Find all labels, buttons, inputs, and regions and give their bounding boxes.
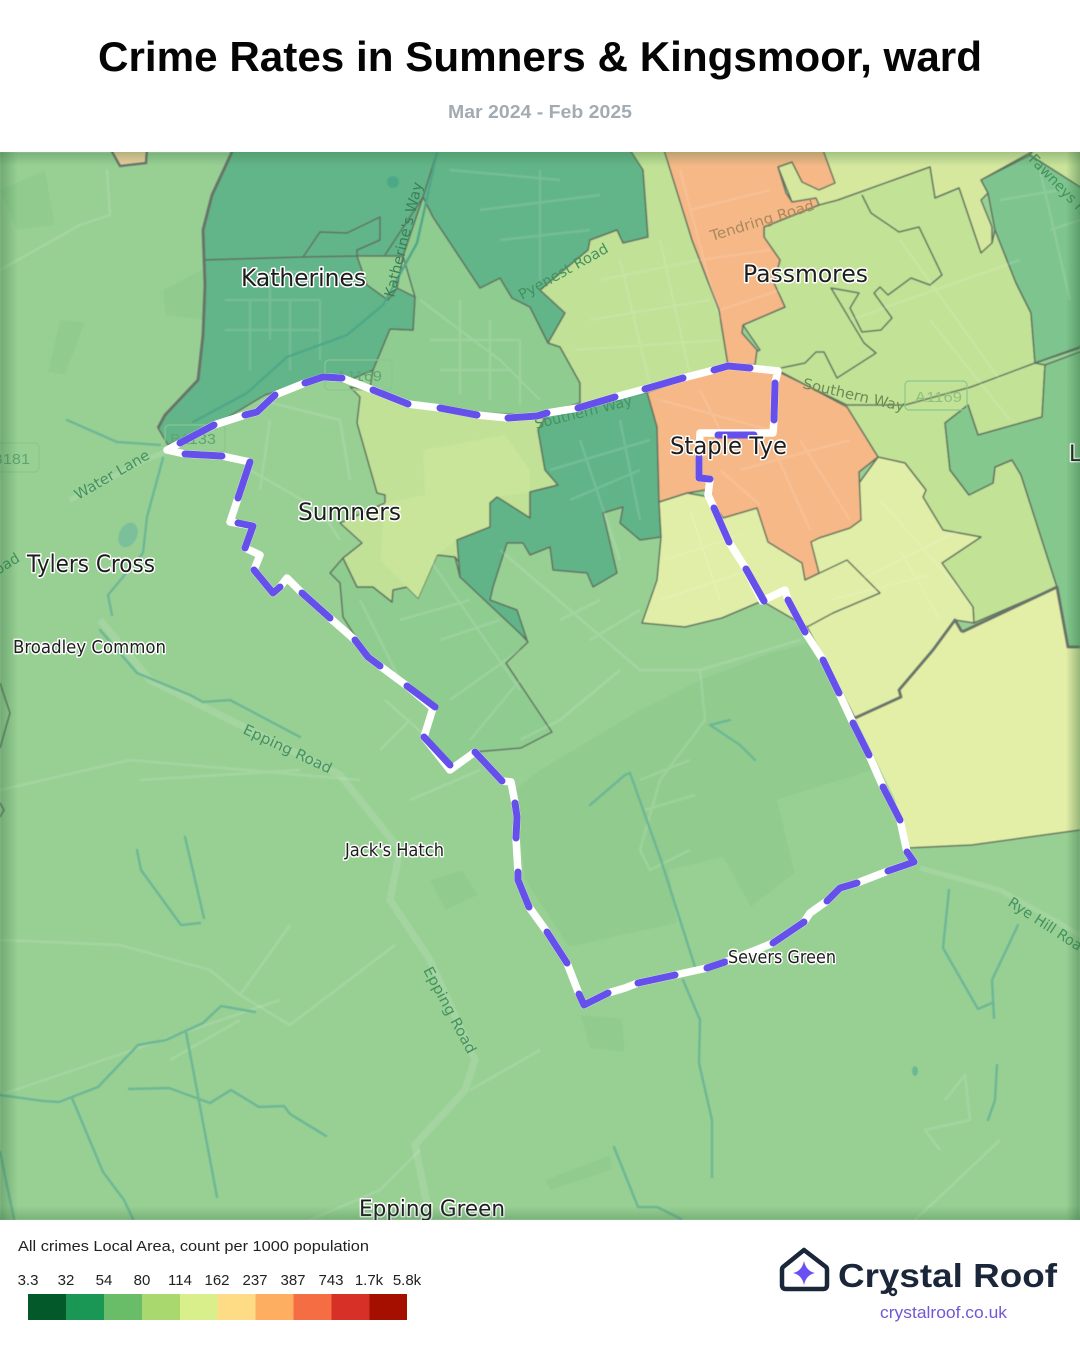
region: Staple Tye orange xyxy=(647,365,878,580)
road name labels: Southern Way xyxy=(801,376,906,415)
map base layer and crime regions xyxy=(0,148,1080,1220)
region: Sumners south darker green xyxy=(330,555,552,770)
region: east yellow green xyxy=(728,167,1057,623)
region: far east mid green xyxy=(981,155,1080,363)
place name labels: Epping Green xyxy=(359,1197,505,1222)
place name labels: Broadley Common xyxy=(13,637,166,658)
region: Katherines dark green xyxy=(158,150,648,445)
place name labels: Severs Green xyxy=(728,947,836,968)
streams and ponds xyxy=(0,153,1018,1219)
legend tick values: 5.8k xyxy=(393,1272,422,1289)
road name labels: Epping Road xyxy=(240,722,334,777)
logo y tail ring xyxy=(890,1289,896,1295)
region: east mid green xyxy=(945,350,1080,650)
place name labels: Passmores xyxy=(743,260,868,288)
legend tick values: 114 xyxy=(168,1272,192,1289)
inner ward lines xyxy=(0,152,1080,848)
road name labels: Water Lane xyxy=(72,448,153,503)
road name labels: Tendring Road xyxy=(707,198,816,245)
choropleth map xyxy=(0,148,1080,1222)
road name labels: Southern Way xyxy=(533,393,634,433)
region: Southern Way dark green xyxy=(457,392,661,640)
map edge vignette xyxy=(0,152,1080,1220)
legend tick values: 80 xyxy=(134,1272,150,1289)
icon: house with star xyxy=(782,1250,827,1289)
subtitle: date range: Mar 2024 - Feb 2025 xyxy=(448,102,632,122)
legend title: All crimes Local Area, count per 1000 population xyxy=(18,1238,369,1255)
logo: Crystal Roof xyxy=(782,1250,1058,1322)
place name labels xyxy=(13,260,1080,1222)
legend tick values: 54 xyxy=(96,1272,112,1289)
streets xyxy=(0,170,1080,1220)
place name labels: Tylers Cross xyxy=(26,550,155,578)
ward boundary: white casing xyxy=(167,366,914,1005)
region: Sumners estate lighter patch xyxy=(384,492,530,598)
place name labels: Sumners xyxy=(298,498,401,526)
legend tick values xyxy=(18,1272,422,1289)
region: south east pale yellow xyxy=(855,587,1080,848)
road name labels xyxy=(0,152,1080,1057)
legend xyxy=(18,1238,422,1320)
place name labels: Jack's Hatch xyxy=(344,840,444,861)
legend tick values: 162 xyxy=(204,1272,230,1289)
field patches xyxy=(0,170,872,1190)
region: Sumners yellow green xyxy=(340,387,558,602)
road shields xyxy=(0,360,967,472)
region: Passmores orange xyxy=(664,150,835,365)
legend tick values: 237 xyxy=(242,1272,268,1289)
legend tick values: 3.3 xyxy=(18,1272,38,1289)
legend tick values: 32 xyxy=(58,1272,74,1289)
legend colour scale xyxy=(28,1294,407,1320)
website link text: crystalroof.co.uk xyxy=(880,1303,1008,1322)
road shields: A1169 xyxy=(915,389,962,406)
region: Katherines notch xyxy=(357,256,403,300)
region: central light green xyxy=(370,197,580,416)
legend tick values: 743 xyxy=(318,1272,344,1289)
road name labels: Epping Road xyxy=(419,964,479,1057)
region: top right corner pale xyxy=(1030,152,1080,186)
ward boundary: purple dashes xyxy=(180,366,914,1005)
road name labels: Katherine's Way xyxy=(382,180,427,299)
legend tick values: 387 xyxy=(280,1272,306,1289)
legend tick values: 1.7k xyxy=(355,1272,384,1289)
logo wordmark: Crystal Roof xyxy=(838,1257,1058,1294)
region: Staple Tye south pale yellow xyxy=(642,457,981,718)
place name labels: Staple Tye xyxy=(670,432,787,460)
region: Pyenest yellow green xyxy=(540,150,728,405)
region: small tan area xyxy=(110,148,147,166)
region: north east pale strip xyxy=(778,150,1035,253)
road shields: B1133 xyxy=(170,431,216,448)
place name labels: Katherines xyxy=(241,264,366,292)
road name labels: Pyenest Road xyxy=(516,241,611,303)
title: Crime Rates in Sumners & Kingsmoor, ward xyxy=(98,33,982,80)
road shields: A1169 xyxy=(336,368,382,385)
